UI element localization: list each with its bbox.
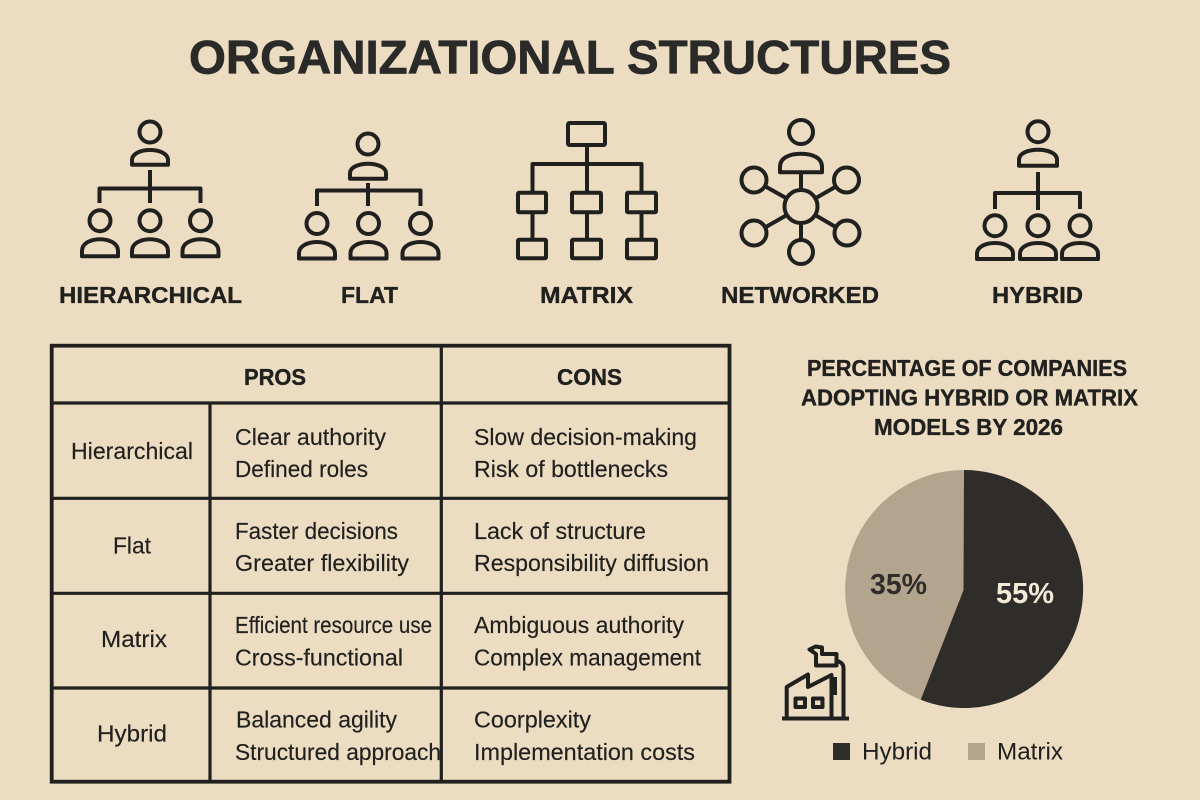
row: flat: Flat xyxy=(113,532,152,558)
row: flat xyxy=(113,518,709,576)
row: flat: Faster decisions xyxy=(235,518,398,544)
row: hierarchical: Slow decision-making xyxy=(474,424,697,450)
label: hybrid: HYBRID xyxy=(992,282,1083,308)
row: hybrid: Balanced agility xyxy=(236,706,397,732)
row: hierarchical: Hierarchical xyxy=(71,438,193,464)
table header: cons: CONS xyxy=(557,364,622,390)
chart heading: ADOPTING HYBRID OR MATRIX xyxy=(801,384,1139,410)
row: hierarchical: Defined roles xyxy=(235,456,368,482)
row: flat: Lack of structure xyxy=(474,518,646,544)
chart heading: PERCENTAGE OF COMPANIES xyxy=(807,355,1127,381)
title: ORGANIZATIONAL STRUCTURES xyxy=(189,31,951,84)
chart heading: MODELS BY 2026 xyxy=(874,414,1063,440)
label: flat: FLAT xyxy=(341,282,399,308)
row: hybrid: Hybrid xyxy=(97,720,167,746)
row: hierarchical: Clear authority xyxy=(235,424,386,450)
row: hybrid xyxy=(97,706,695,765)
value: 55%: 55% xyxy=(996,578,1054,610)
row: matrix: Complex management xyxy=(474,644,702,670)
icon: networked structure xyxy=(742,120,860,264)
row: matrix: Cross-functional xyxy=(235,644,403,670)
table header: pros: PROS xyxy=(244,364,306,390)
row: matrix: Matrix xyxy=(101,626,168,652)
table grid xyxy=(52,346,729,782)
row: matrix: Efficient resource use xyxy=(235,612,432,638)
label: matrix: MATRIX xyxy=(540,282,633,308)
label: networked: NETWORKED xyxy=(721,282,879,308)
slice: hybrid 55% xyxy=(921,470,1083,708)
panel: pros and cons table xyxy=(52,346,729,782)
row: hybrid: Coorplexity xyxy=(474,706,592,732)
row: hierarchical: Risk of bottlenecks xyxy=(474,456,668,482)
legend xyxy=(833,738,1063,766)
row: flat: Responsibility diffusion xyxy=(474,550,709,576)
legend item: matrix: Matrix xyxy=(997,738,1063,766)
value: 35%: 35% xyxy=(870,569,927,601)
label: hierarchical: HIERARCHICAL xyxy=(59,282,242,308)
legend item: matrix xyxy=(968,738,1063,766)
row: flat: Greater flexibility xyxy=(235,550,410,576)
row: hybrid: Structured approach xyxy=(235,739,441,765)
icon: hierarchical org chart xyxy=(82,122,218,256)
row: hierarchical xyxy=(71,424,697,482)
chart heading xyxy=(801,355,1139,440)
row: matrix: Ambiguous authority xyxy=(474,612,684,638)
icon: matrix org chart xyxy=(518,123,656,258)
icon: hybrid org chart xyxy=(977,121,1098,259)
pie chart xyxy=(845,470,1083,708)
row: matrix xyxy=(101,612,702,670)
legend item: hybrid: Hybrid xyxy=(862,738,932,766)
row: hybrid: Implementation costs xyxy=(474,739,695,765)
icon: flat org chart xyxy=(299,134,438,258)
slice: matrix 35% xyxy=(845,470,964,700)
icon: factory xyxy=(782,646,849,718)
